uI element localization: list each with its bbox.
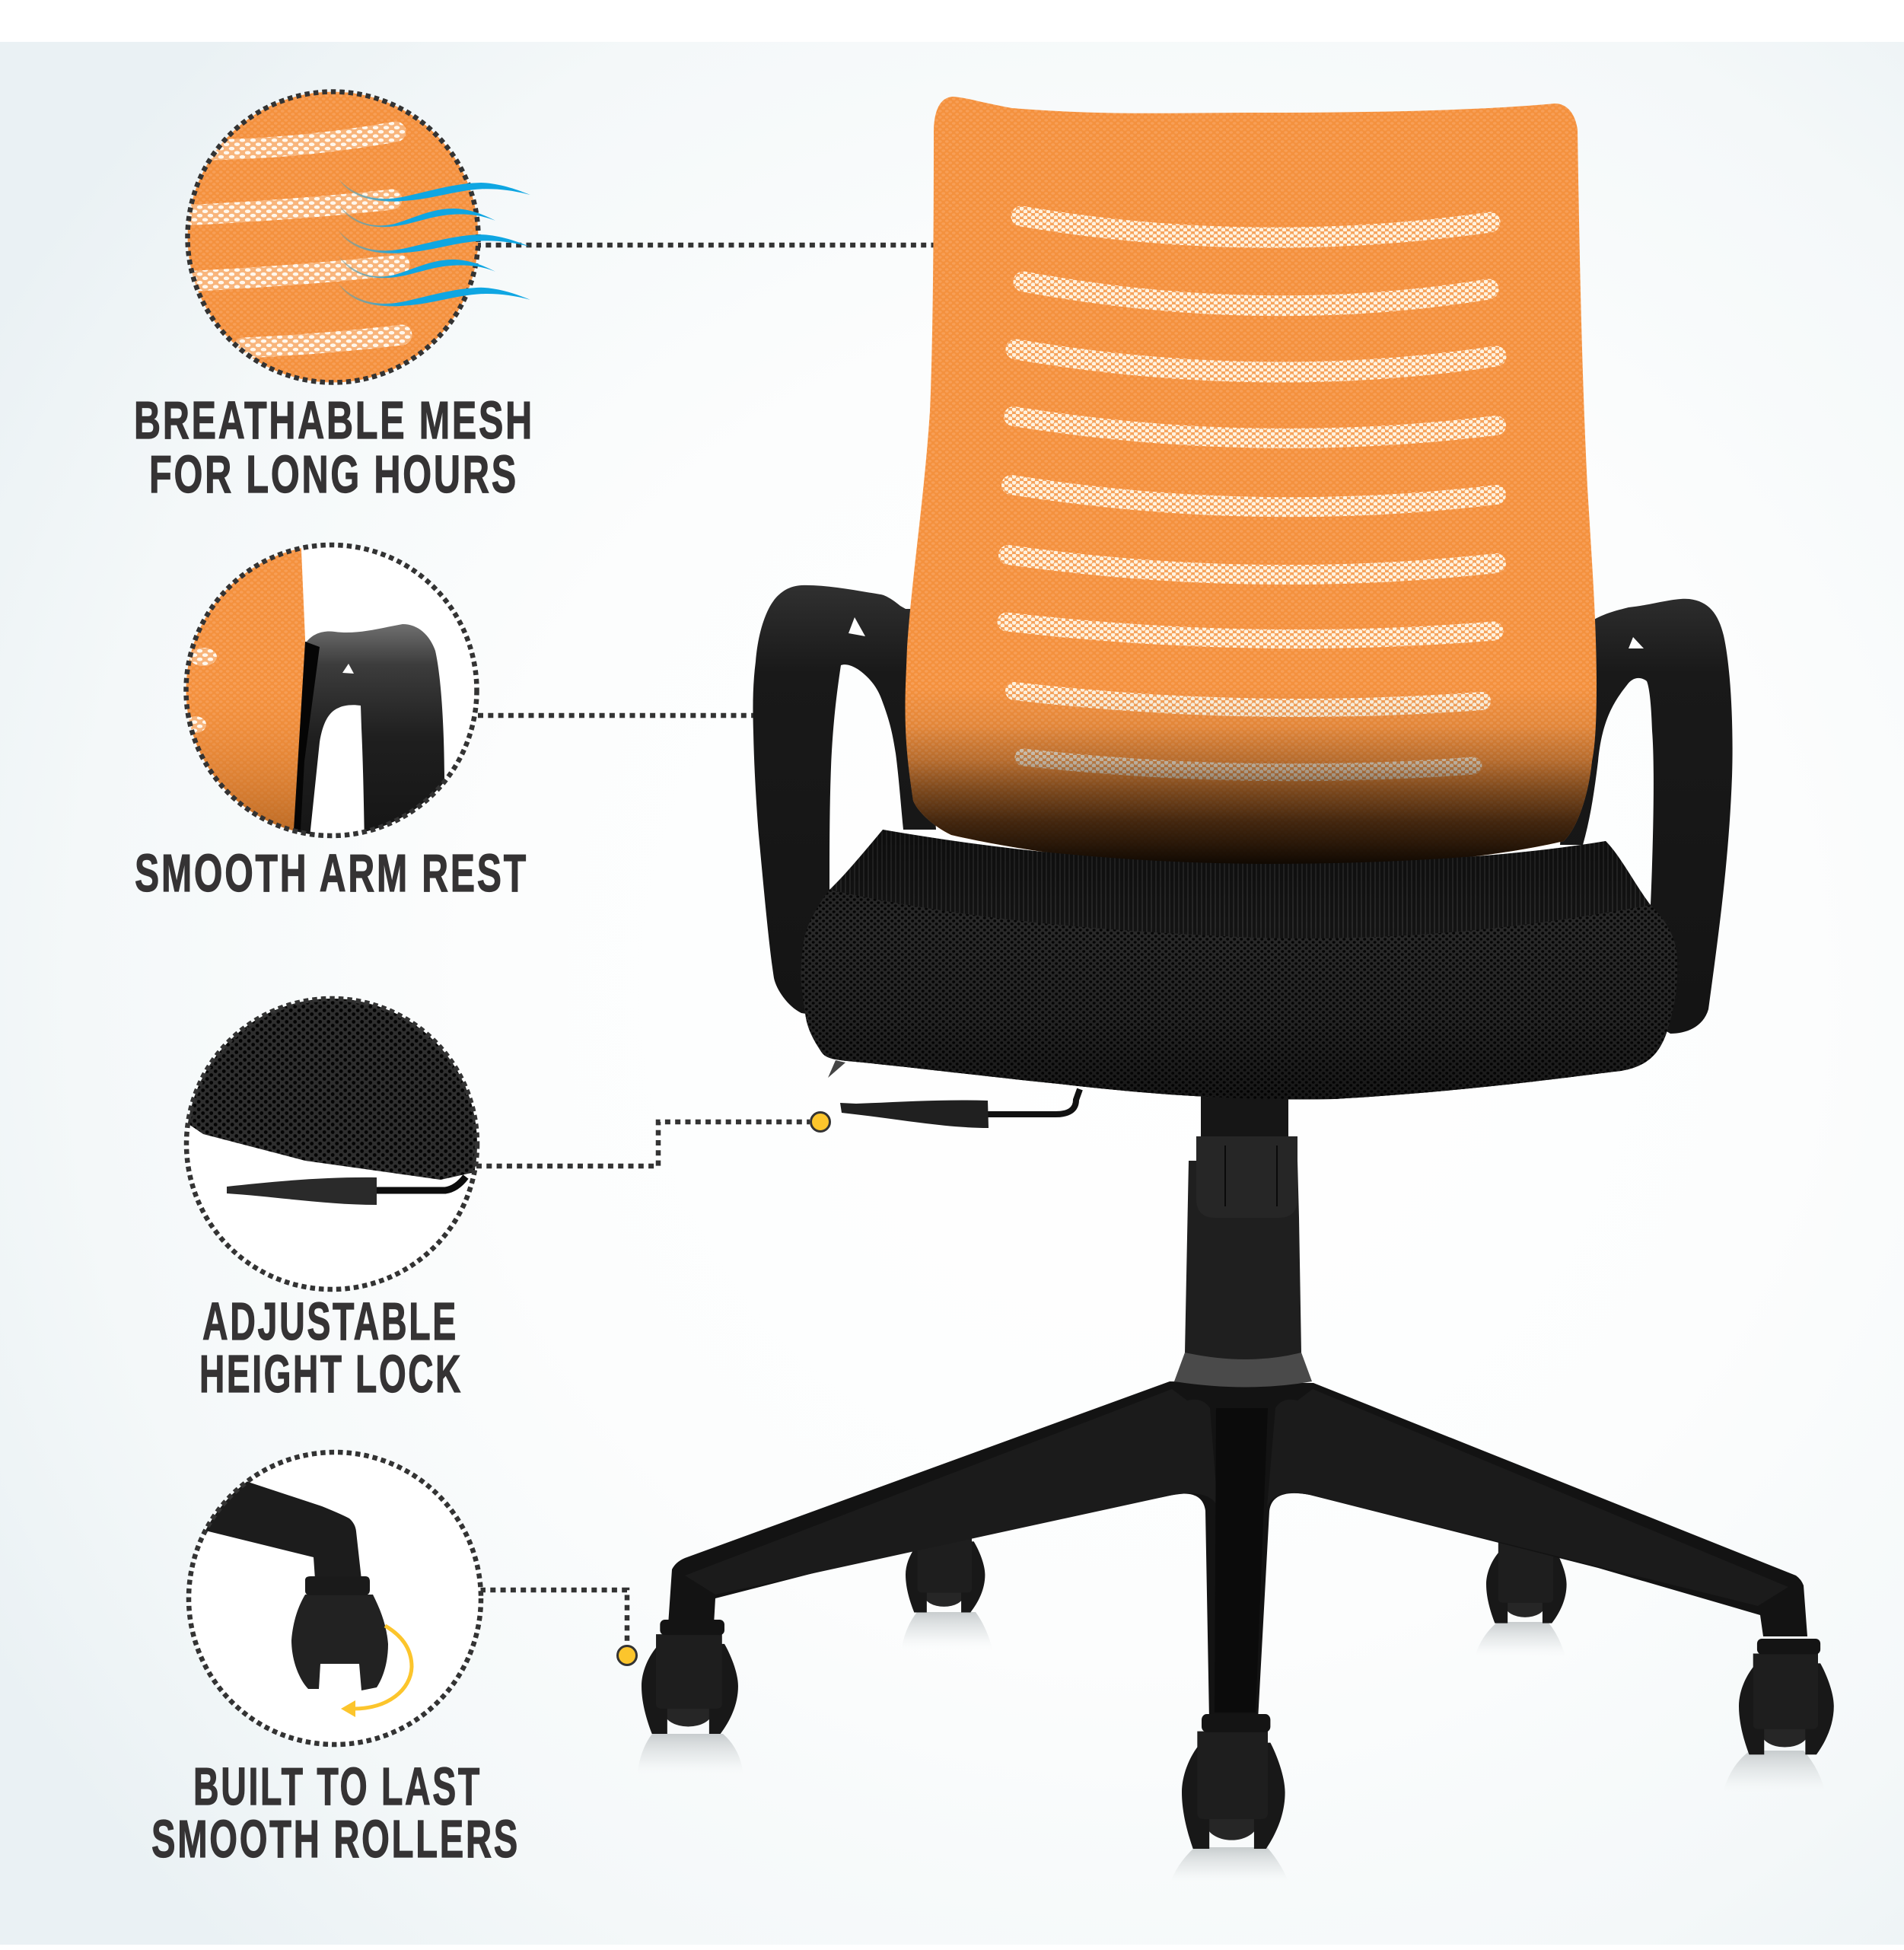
- chair photo: [637, 97, 1834, 1885]
- front casters: [642, 1620, 1834, 1849]
- height lever: [840, 1089, 1080, 1128]
- heading: adjustable height lock: HEIGHT LOCK: [199, 1344, 463, 1404]
- zoom circle with arm detail: [186, 546, 444, 834]
- connector: arm rest callout to arm: [478, 713, 755, 718]
- dotted ring: [186, 545, 476, 836]
- dot: caster marker: [618, 1646, 636, 1665]
- caster reflections: [637, 1612, 1826, 1885]
- five-star base: [668, 1381, 1807, 1720]
- connector: height lock callout to lever: [476, 1122, 810, 1166]
- heading: built to last smooth rollers: [151, 1757, 520, 1869]
- heading: built to last smooth rollers: SMOOTH ROLLERS: [151, 1809, 520, 1869]
- heading: breathable mesh: [134, 390, 534, 504]
- dotted ring: [187, 91, 478, 382]
- icon: air flow waves: [339, 179, 530, 306]
- callout: adjustable height lock: [183, 989, 487, 1404]
- heading: smooth arm rest: SMOOTH ARM REST: [135, 843, 528, 903]
- zoom circle with mesh detail: [183, 91, 478, 382]
- heading: adjustable height lock: ADJUSTABLE: [202, 1292, 458, 1351]
- arm bracket gaps: [849, 617, 1644, 648]
- icon: rotation arrow: [341, 1626, 412, 1717]
- heading: built to last smooth rollers: BUILT TO LAST: [193, 1757, 482, 1816]
- connector: rollers callout to caster: [480, 1590, 627, 1644]
- rear casters: [906, 1522, 1567, 1623]
- zoom circle with lever detail: [187, 999, 477, 1274]
- zoom circle with caster detail: [175, 1452, 481, 1744]
- connector: mesh callout to backrest: [476, 243, 935, 247]
- gas lift column: [1174, 1088, 1312, 1387]
- mesh backrest: [905, 97, 1597, 868]
- heading: breathable mesh: FOR LONG HOURS: [149, 444, 518, 504]
- left arm rest: [753, 585, 936, 1020]
- callout: smooth arm rest: [135, 533, 528, 903]
- dot: height lever marker: [811, 1113, 829, 1131]
- dotted ring: [189, 1452, 481, 1744]
- right arm rest: [1560, 599, 1733, 1034]
- dotted ring: [186, 999, 477, 1289]
- heading: adjustable height lock: [199, 1292, 463, 1404]
- heading: breathable mesh: BREATHABLE MESH: [134, 390, 534, 450]
- seat cushion: [801, 830, 1677, 1099]
- callout: breathable mesh: [134, 91, 534, 504]
- seat tag: [828, 1060, 845, 1078]
- ventilation stripes: [1007, 216, 1496, 773]
- callout: built to last smooth rollers: [151, 1452, 520, 1869]
